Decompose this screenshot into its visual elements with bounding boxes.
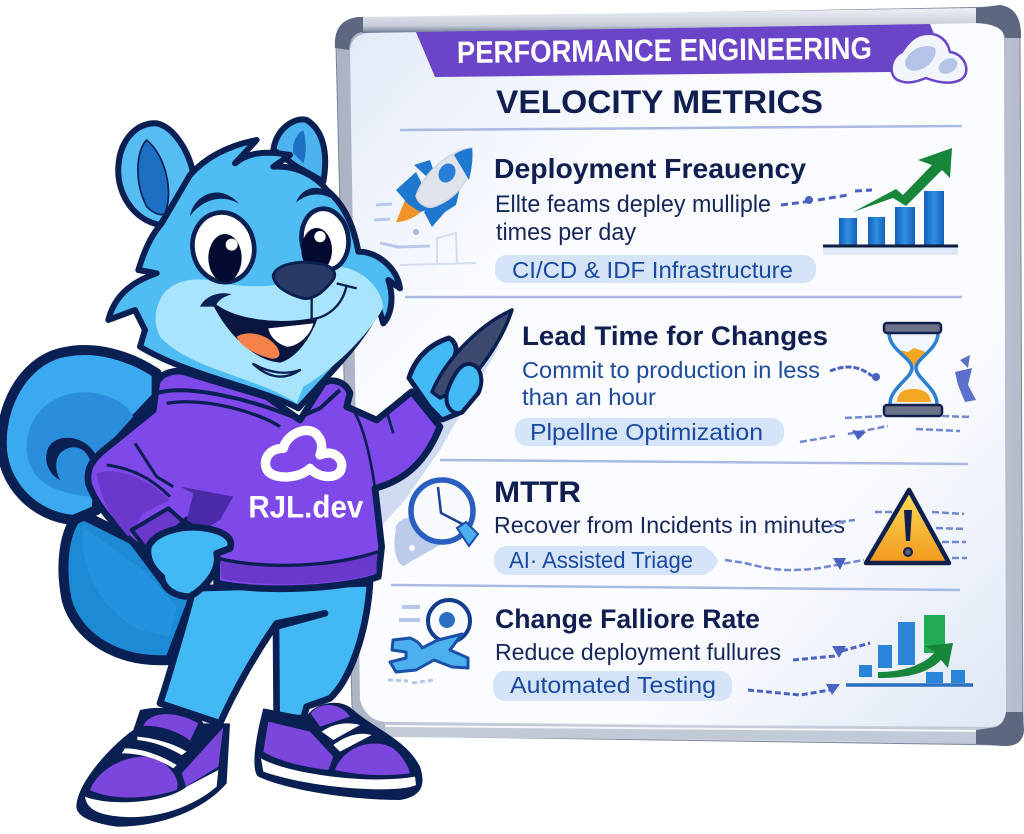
description: Commit to production in less — [522, 357, 820, 383]
icon: warning triangle — [725, 490, 967, 570]
tag pill: Automated Testing — [510, 672, 716, 698]
tail — [2, 350, 197, 660]
left shoe — [76, 708, 230, 827]
hand on hip — [148, 527, 231, 597]
panel: change failure rate — [388, 600, 973, 701]
right eye — [298, 206, 352, 273]
muzzle — [156, 267, 383, 403]
chart: bars with recovery arrow — [748, 615, 973, 695]
description: Recover from Incidents in minutes — [494, 512, 845, 538]
squirrel body and hoodie — [2, 350, 440, 827]
marker pen — [432, 310, 512, 398]
mascot: squirrel — [2, 119, 512, 827]
ears — [118, 119, 325, 225]
whiteboard — [335, 5, 1024, 746]
description: times per day — [496, 219, 636, 246]
heading: Lead Time for Changes — [522, 321, 828, 351]
description: Ellte feams depley mulliple — [495, 191, 771, 218]
hoodie text: RJL.dev: RJL.dev — [248, 490, 364, 525]
description: than an hour — [522, 384, 656, 410]
tag pill: CI/CD & IDF Infrastructure — [512, 257, 793, 283]
banner: performance engineering: PERFORMANCE ENGINEERING — [457, 31, 872, 70]
icon: wrench and gear — [388, 600, 470, 683]
icon: rocket — [374, 148, 476, 265]
icon: cloud on banner — [892, 34, 966, 83]
squirrel shadow on board — [372, 345, 500, 530]
description: Reduce deployment fullures — [495, 639, 781, 665]
heading: Deployment Freauency — [494, 153, 806, 184]
panel: deployment frequency — [374, 148, 958, 283]
icon: hourglass — [800, 323, 976, 442]
description — [495, 191, 771, 246]
panel: lead time for changes — [515, 321, 976, 446]
tag pill: Plpellne Optimization — [530, 419, 763, 445]
hoodie — [88, 371, 440, 589]
mouth — [200, 283, 357, 377]
brows — [190, 188, 341, 216]
legs — [160, 583, 370, 723]
heading: velocity metrics: VELOCITY METRICS — [496, 84, 823, 120]
heading: Change Falliore Rate — [495, 604, 760, 634]
heading: MTTR — [494, 476, 581, 509]
squirrel head — [108, 119, 400, 408]
chart: rising bars with arrow — [781, 148, 958, 255]
right shoe — [254, 703, 422, 800]
icon: clock — [394, 480, 478, 566]
gripping fingers — [446, 364, 481, 413]
description — [522, 357, 820, 410]
head shape — [108, 140, 400, 408]
pointing hand palm — [409, 338, 480, 420]
tag pill: AI· Assisted Triage — [509, 547, 693, 573]
banner: performance engineering — [416, 24, 945, 77]
panel: mttr — [394, 476, 967, 575]
left eye — [186, 207, 261, 288]
tag pill — [493, 671, 732, 701]
hoodie logo: cloud — [265, 430, 342, 477]
nose — [273, 262, 335, 299]
